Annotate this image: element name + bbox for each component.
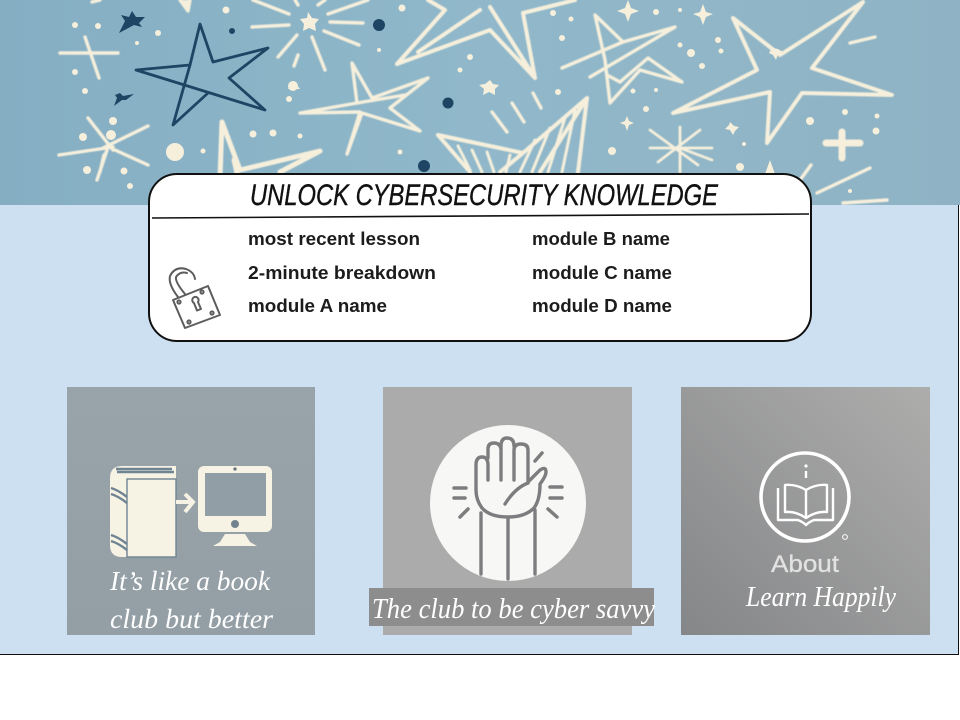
caption band: The club to be cyber savvy xyxy=(372,594,656,625)
caption: It’s like a book xyxy=(109,566,271,596)
module links right column xyxy=(532,229,672,316)
about label: About xyxy=(771,551,839,578)
module links right column: module D name xyxy=(532,296,672,316)
cream star doodles xyxy=(59,0,892,203)
icon: open book in circle xyxy=(761,453,849,541)
dark outlined star xyxy=(136,24,268,125)
icon: open padlock xyxy=(170,268,220,328)
lesson links left column: module A name xyxy=(248,296,387,316)
icon: book to monitor xyxy=(110,466,272,557)
panel: cyber savvy card xyxy=(369,387,656,635)
panel: about card xyxy=(681,387,930,635)
caption: Learn Happily xyxy=(745,581,896,613)
panel: unlock knowledge card xyxy=(149,174,811,341)
module links right column: module C name xyxy=(532,263,672,283)
lesson links left column xyxy=(248,229,436,316)
icon: raised hand xyxy=(430,425,586,581)
caption: club but better xyxy=(110,604,274,634)
header banner with stars xyxy=(0,0,960,205)
cream dots xyxy=(72,0,880,193)
lesson links left column: most recent lesson xyxy=(248,229,420,249)
panel: book club card xyxy=(67,387,315,635)
title: UNLOCK CYBERSECURITY KNOWLEDGE xyxy=(250,179,719,212)
module links right column: module B name xyxy=(532,229,670,249)
dark small stars and dots xyxy=(114,11,454,172)
caption xyxy=(109,566,274,634)
lesson links left column: 2-minute breakdown xyxy=(248,263,436,283)
